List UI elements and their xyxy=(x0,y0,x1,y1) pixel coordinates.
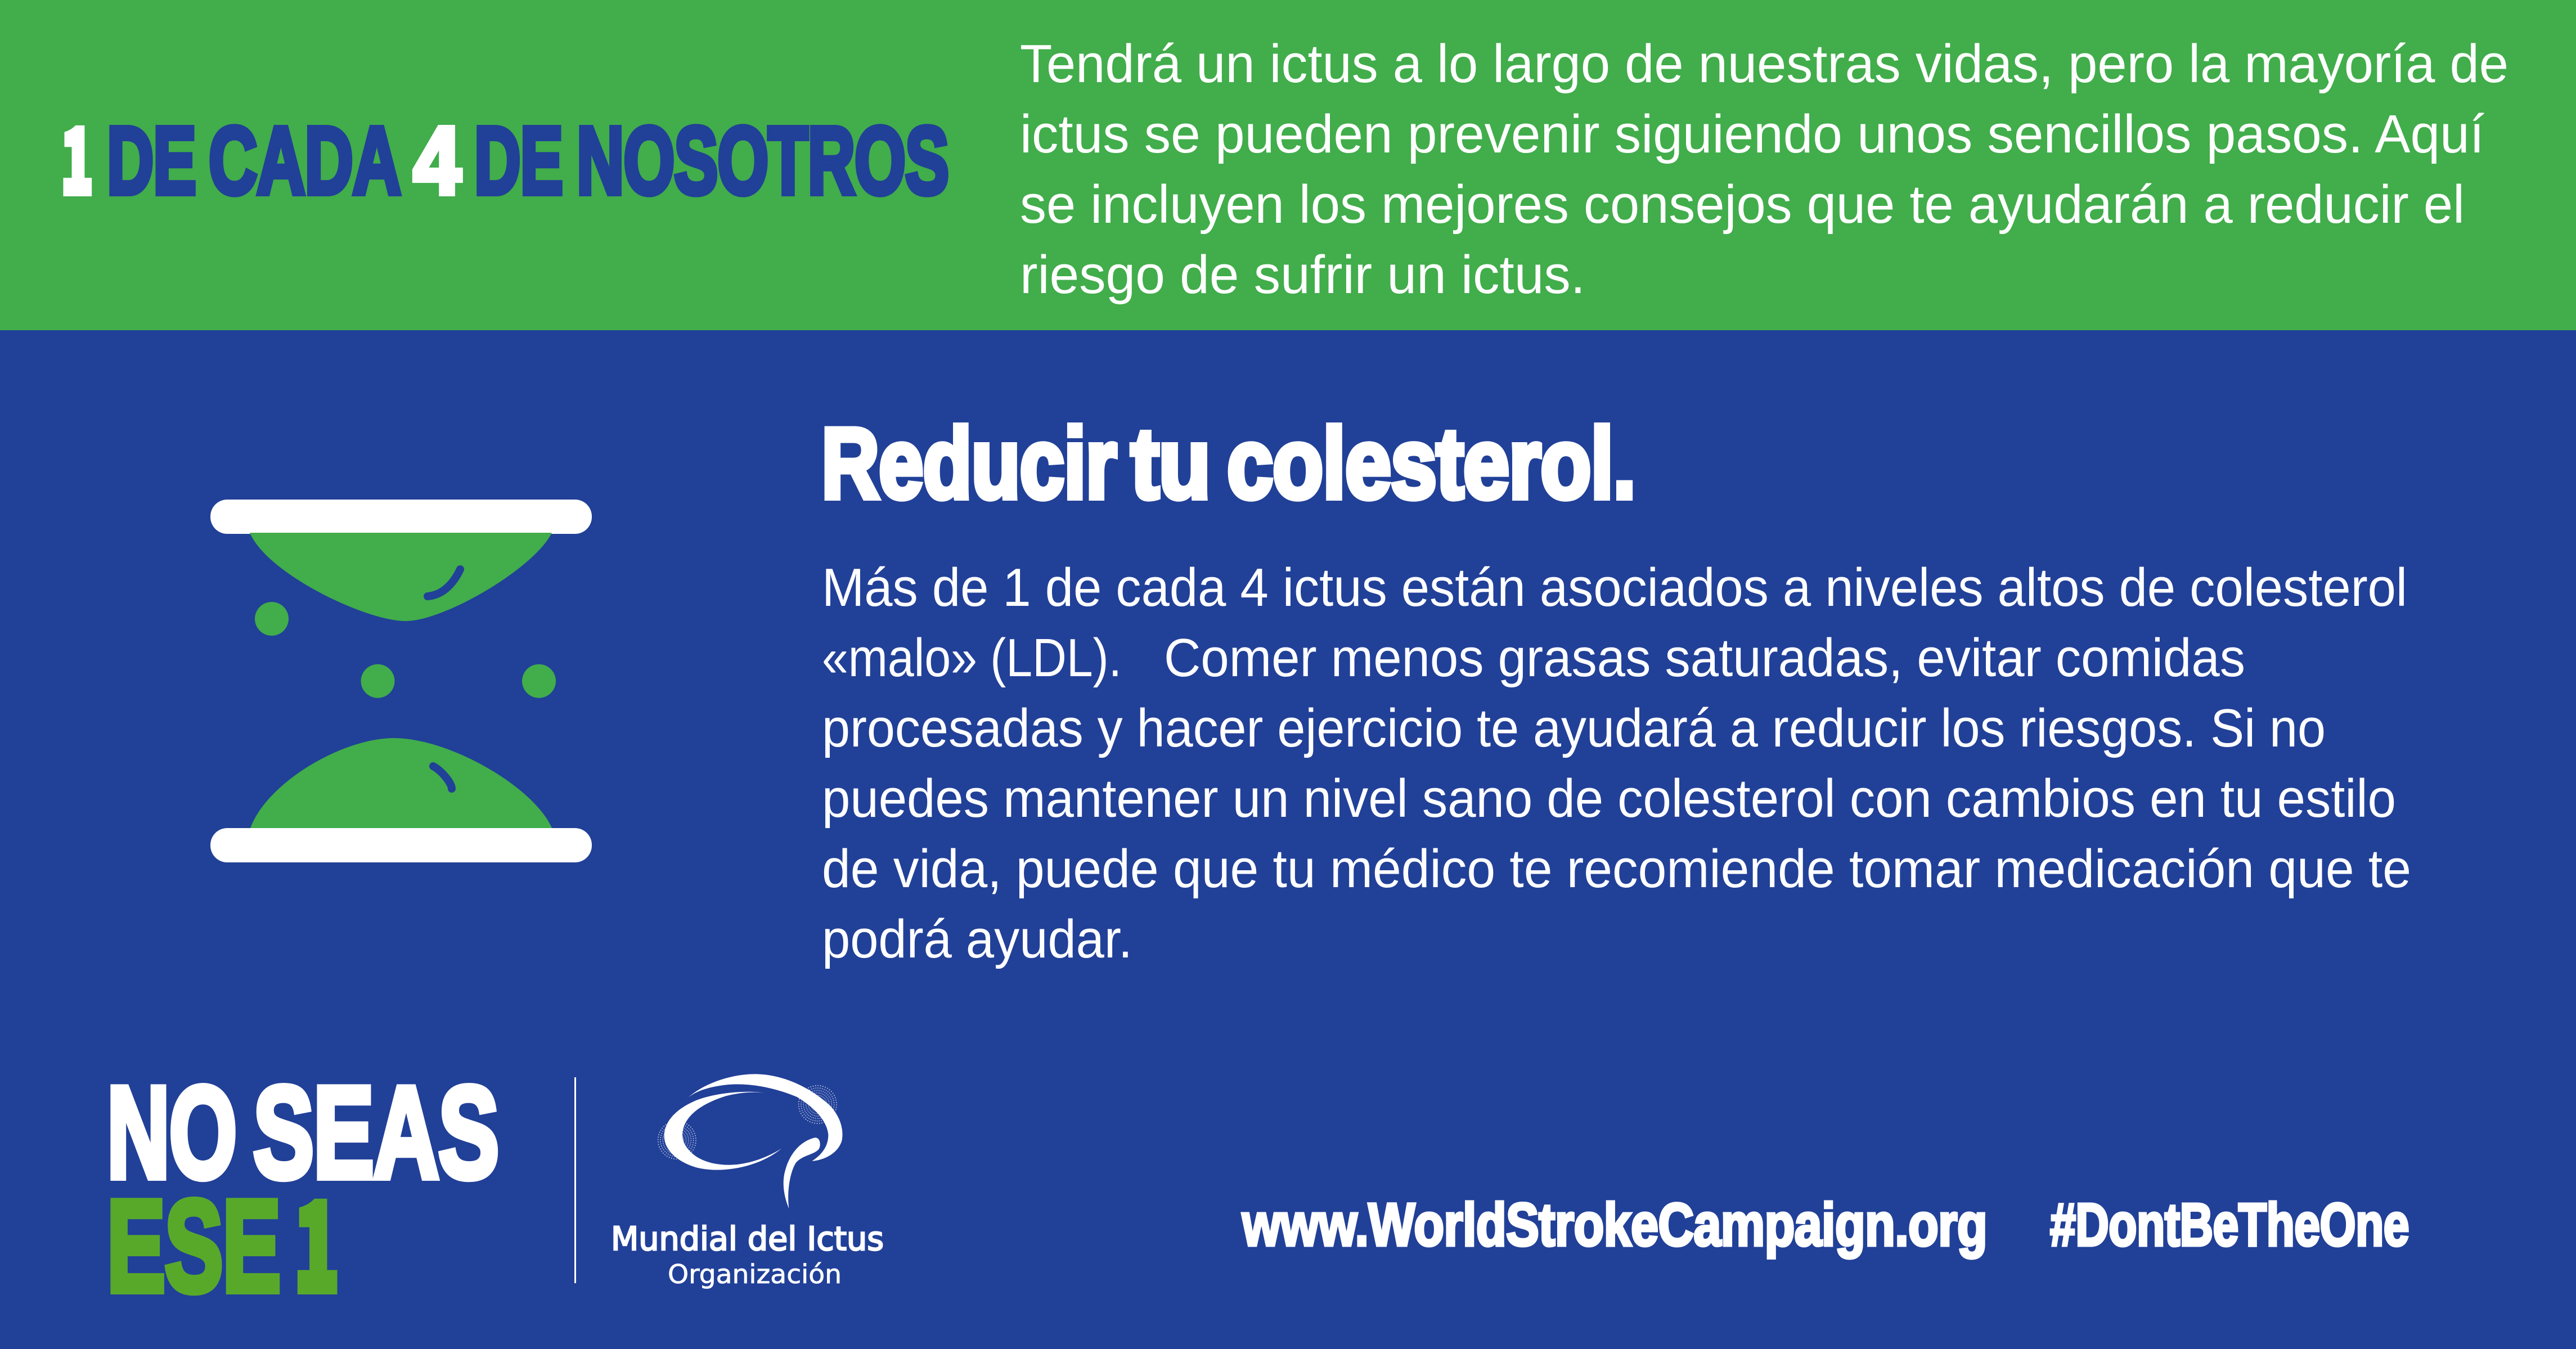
campaign slogan: no seas ese 1: ESE xyxy=(107,1173,280,1319)
heading: 1 de cada 4 de nosotros: DE xyxy=(107,107,196,214)
heading: 1 de cada 4 de nosotros: DE xyxy=(474,107,563,214)
logo text: mundial del ictus: Mundial del Ictus xyxy=(611,1220,884,1258)
heading: 1 de cada 4 de nosotros: NOSOTROS xyxy=(577,107,948,214)
campaign slogan: no seas ese 1: NO xyxy=(107,1060,236,1206)
text block: intro paragraph: Tendrá un ictus a lo largo de nuestras vidas, pero la mayoría de xyxy=(1020,34,2508,94)
icon part: lower highlight xyxy=(433,766,452,789)
heading: reducir tu colesterol: tu xyxy=(1131,407,1210,519)
campaign slogan: no seas ese 1: 1 xyxy=(294,1149,340,1326)
text block: cholesterol advice: «malo» (LDL). xyxy=(822,628,1122,688)
text block: cholesterol advice: Comer menos grasas saturadas, evitar comidas xyxy=(1164,628,2245,688)
text block: intro paragraph: ictus se pueden prevenir siguiendo unos sencillos pasos. Aquí xyxy=(1020,104,2484,164)
heading: 1 de cada 4 de nosotros: 4 xyxy=(413,107,461,214)
divider line xyxy=(574,1077,576,1283)
icon part: bottom bar xyxy=(210,828,592,862)
heading: reducir tu colesterol xyxy=(821,407,1635,519)
hashtag: #DontBeTheOne xyxy=(2050,1190,2409,1258)
campaign slogan: no seas ese 1 xyxy=(107,1060,498,1326)
website url: www.WorldStrokeCampaign.org xyxy=(1242,1190,1987,1258)
campaign slogan: no seas ese 1: SEAS xyxy=(253,1060,498,1206)
text block: intro paragraph: riesgo de sufrir un ictus. xyxy=(1020,245,1585,305)
heading: 1 de cada 4 de nosotros: 1 xyxy=(61,89,93,220)
logo: world stroke organization xyxy=(611,1074,884,1289)
heading: reducir tu colesterol: Reducir xyxy=(821,407,1116,519)
text block: cholesterol advice: puedes mantener un nivel sano de colesterol con cambios en tu estilo xyxy=(822,768,2396,829)
icon part: left droplet xyxy=(255,602,289,636)
panel: green header band xyxy=(0,0,2576,330)
text block: intro paragraph xyxy=(1020,34,2508,305)
text block: cholesterol advice: procesadas y hacer ejercicio te ayudará a reducir los riesgos. Si no xyxy=(822,698,2326,758)
text block: cholesterol advice: Más de 1 de cada 4 ictus están asociados a niveles altos de colesterol xyxy=(822,557,2407,618)
logo text: organizacion: Organización xyxy=(668,1259,842,1289)
icon part: upper highlight xyxy=(428,569,460,596)
heading: reducir tu colesterol: colesterol. xyxy=(1227,407,1635,519)
icon part: top bar xyxy=(210,500,592,534)
icon part: upper green mass xyxy=(250,533,552,621)
text block: cholesterol advice: podrá ayudar. xyxy=(822,909,1132,969)
heading: 1 de cada 4 de nosotros xyxy=(61,89,948,220)
text block: cholesterol advice xyxy=(822,557,2411,969)
text block: intro paragraph: se incluyen los mejores consejos que te ayudarán a reducir el xyxy=(1020,174,2465,235)
logo mark: brain swirl xyxy=(658,1074,842,1208)
heading: 1 de cada 4 de nosotros: CADA xyxy=(209,107,401,214)
icon part: lower green mass xyxy=(250,738,552,828)
icon part: middle droplet xyxy=(361,664,395,698)
text block: cholesterol advice: de vida, puede que tu médico te recomiende tomar medicación que te xyxy=(822,839,2411,899)
icon part: right droplet xyxy=(522,664,556,698)
icon: cholesterol hourglass xyxy=(210,500,592,862)
